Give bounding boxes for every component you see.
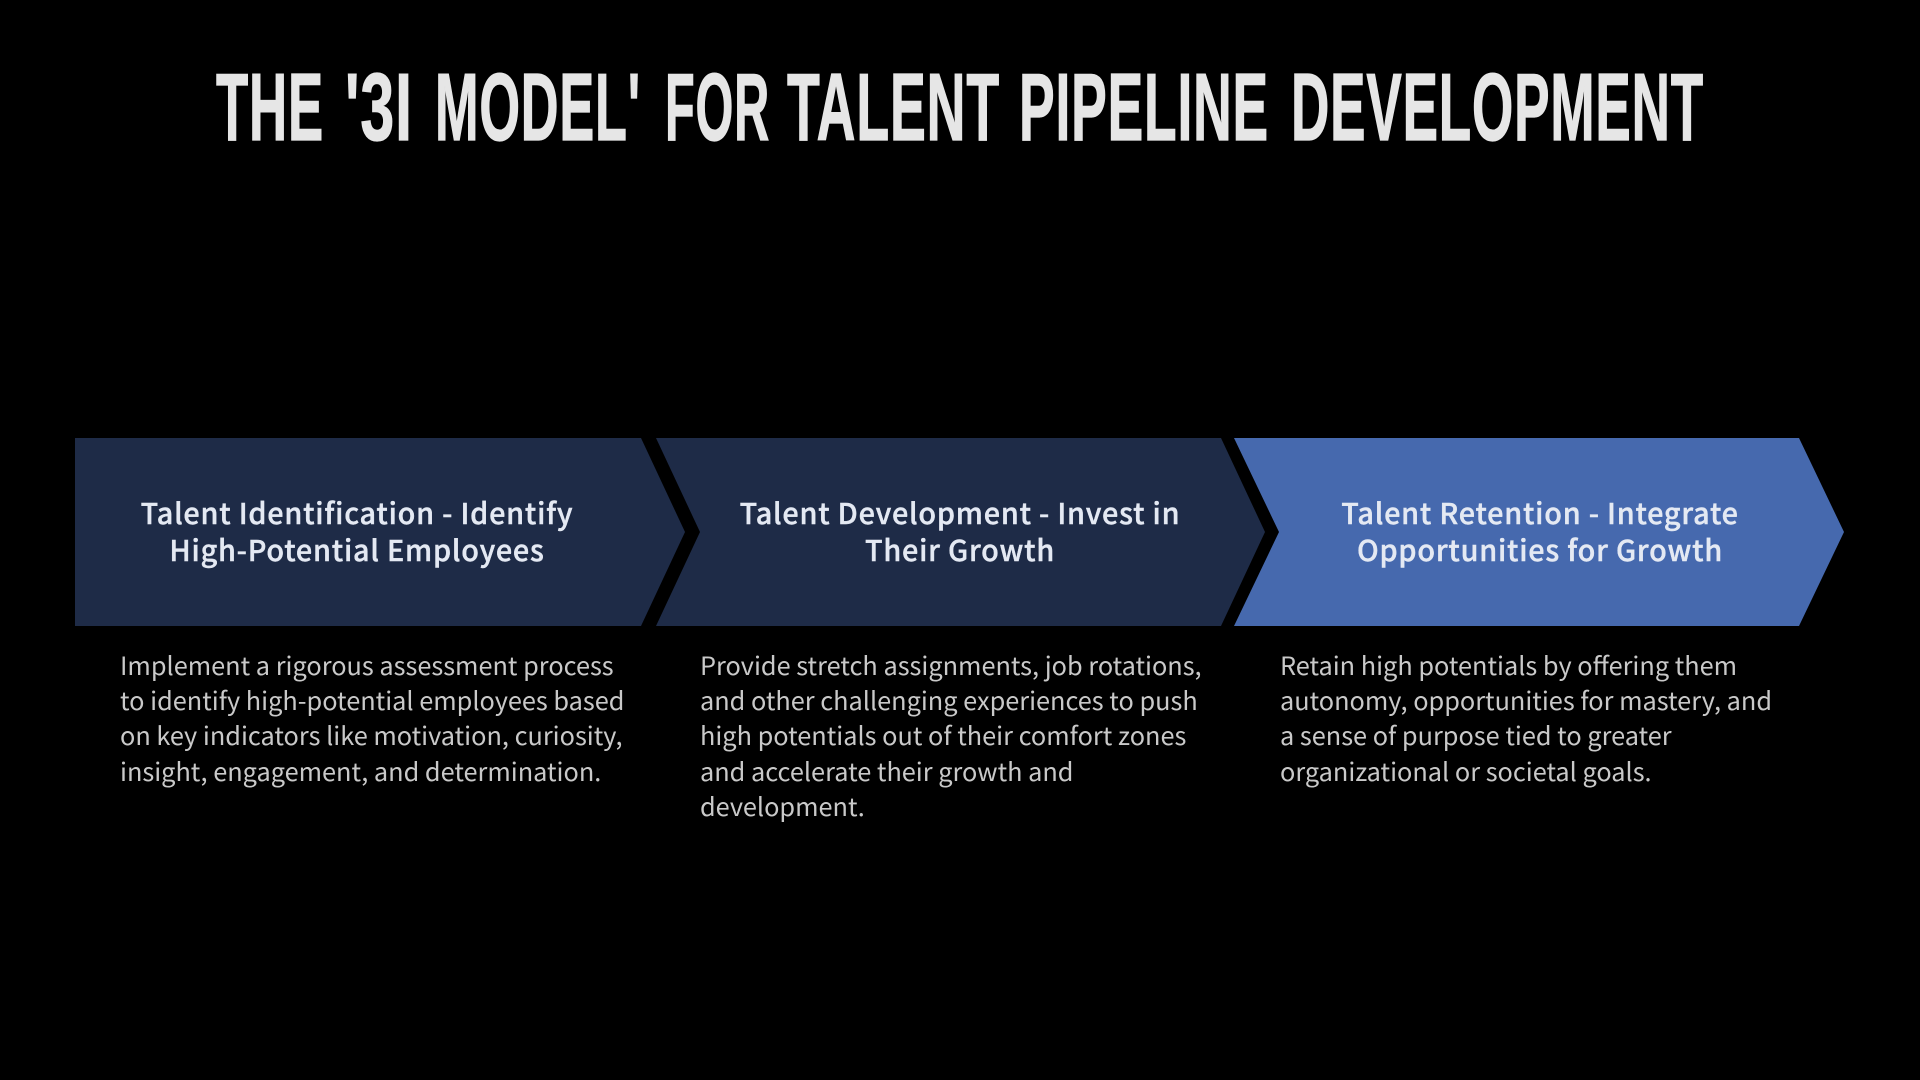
heading: step 3: Opportunities for Growth bbox=[1357, 528, 1723, 570]
arrow: step 3 bbox=[1234, 438, 1844, 626]
title: TALENT bbox=[787, 54, 1000, 161]
title: FOR bbox=[665, 54, 770, 161]
text: step 3 description: autonomy, opportunities for mastery, and bbox=[1280, 682, 1772, 718]
text: step 3 description: organizational or societal goals. bbox=[1280, 753, 1652, 789]
text: step 3 description: Retain high potentials by offering them bbox=[1280, 646, 1737, 682]
heading: step 1: Talent Identification - Identify bbox=[141, 492, 573, 532]
text: step 2 description: Provide stretch assignments, job rotations, bbox=[700, 646, 1202, 682]
text: step 2 description: and accelerate their growth and bbox=[700, 753, 1073, 789]
heading: step 3: Talent Retention - Integrate bbox=[1341, 492, 1739, 532]
heading: step 2: Talent Development - Invest in bbox=[740, 492, 1180, 532]
text: step 1 description: Implement a rigorous assessment process bbox=[120, 646, 614, 682]
title: THE bbox=[216, 54, 324, 161]
text: step 2 description: development. bbox=[700, 788, 865, 824]
text: step 1 description bbox=[120, 646, 624, 789]
heading: step 1: High-Potential Employees bbox=[169, 528, 545, 570]
title bbox=[216, 54, 1704, 161]
text: step 1 description: on key indicators like motivation, curiosity, bbox=[120, 717, 623, 753]
title: '3I bbox=[345, 54, 413, 161]
text: step 1 description: to identify high-potential employees based bbox=[120, 682, 624, 718]
heading: step 2: Their Growth bbox=[865, 528, 1055, 570]
heading: step 2 bbox=[740, 492, 1180, 570]
text: step 2 description bbox=[700, 646, 1202, 824]
title: PIPELINE bbox=[1019, 54, 1269, 161]
text: step 2 description: high potentials out of their comfort zones bbox=[700, 717, 1186, 753]
panel: talent identification bbox=[75, 438, 685, 789]
text: step 3 description: a sense of purpose tied to greater bbox=[1280, 717, 1672, 753]
title: MODEL' bbox=[435, 54, 641, 161]
arrow: step 2 bbox=[656, 438, 1265, 626]
arrow: step 1 bbox=[75, 438, 685, 626]
text: step 1 description: insight, engagement, and determination. bbox=[120, 753, 601, 789]
text: step 2 description: and other challenging experiences to push bbox=[700, 682, 1198, 718]
text: step 3 description bbox=[1280, 646, 1772, 789]
heading: step 3 bbox=[1341, 492, 1739, 570]
panel: talent development bbox=[656, 438, 1265, 824]
panel: talent retention bbox=[1234, 438, 1844, 789]
heading: step 1 bbox=[141, 492, 573, 570]
